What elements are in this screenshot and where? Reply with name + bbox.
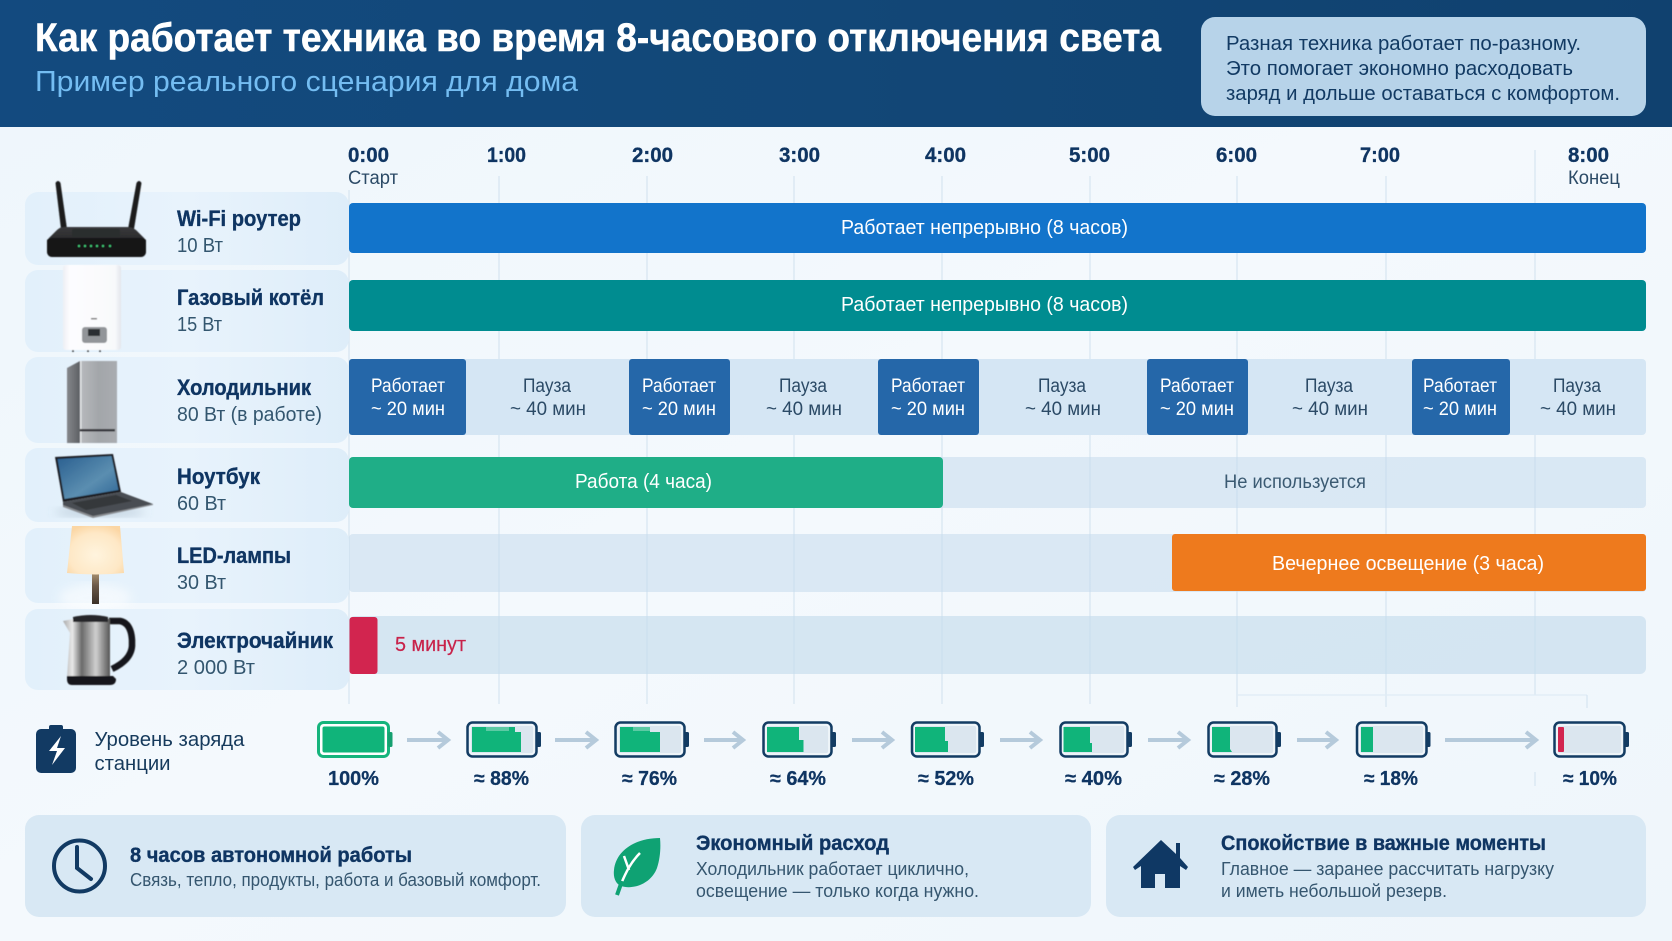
pause 1 [510,376,586,420]
battery 18%: ≈ 18% [1364,768,1418,790]
pause 2 [766,376,842,420]
battery 88% [468,722,541,790]
icon: leaf [614,838,660,895]
row: LED lamps: 30 Вт [177,572,226,594]
row: laptop [25,448,349,522]
arrow [407,732,448,748]
icon: laptop [55,454,153,518]
row: Wi-Fi router: Wi-Fi роутер [177,206,301,231]
subtitle: Пример реального сценария для дома [35,66,579,98]
battery 40%: ≈ 40% [1065,768,1122,790]
row: kettle: Электрочайник [177,628,334,653]
row: gas boiler [25,265,349,352]
battery label: Уровень заряда [94,729,245,751]
bar: kettle usage [349,616,1646,674]
bar: lamps usage: Вечернее освещение (3 часа) [1272,553,1544,575]
callout: Это помогает экономно расходовать [1226,58,1573,80]
bar: lamps usage [349,534,1646,592]
time axis labels: 8:00 [1568,144,1609,167]
battery 88%: ≈ 88% [474,768,529,790]
time axis labels [348,144,1620,189]
time axis labels: Старт [348,168,398,189]
arrow [704,732,743,748]
panel: economical use: освещение — только когда нужно. [696,881,979,901]
time axis labels: 7:00 [1360,144,1400,167]
time axis labels: 6:00 [1216,144,1257,167]
bar: router continuous: Работает непрерывно (8 часов) [841,217,1128,239]
row: laptop: 60 Вт [177,493,226,515]
pause 5: Пауза [1553,376,1601,397]
row: gas boiler: 15 Вт [177,314,222,336]
panel: 8 hours autonomy [25,815,566,917]
work block 1: Работает [371,376,445,397]
work block 4: Работает [1160,376,1234,397]
pause 1: Пауза [523,376,571,397]
work block 1: ~ 20 мин [371,399,445,420]
battery 64% [764,722,836,790]
callout: заряд и дольше оставаться с комфортом. [1226,83,1620,105]
time axis labels: 3:00 [779,144,820,167]
row: kettle [25,609,349,690]
callout [1201,17,1646,116]
pause 1: ~ 40 мин [510,399,586,420]
time axis labels: 0:00 [348,144,389,167]
panel: peace of mind: Главное — заранее рассчитать нагрузку [1221,859,1554,879]
battery 10% [1554,722,1629,790]
icon: house [1133,840,1188,888]
work block 2: Работает [642,376,716,397]
arrow [1148,732,1188,748]
icon: battery with bolt [36,725,76,773]
icon: fridge [67,361,117,443]
arrow [555,732,596,748]
battery label: станции [94,753,170,775]
pause 3: Пауза [1038,376,1086,397]
bar: laptop usage [349,457,1646,508]
work block 4 [1147,359,1248,435]
arrow [1297,732,1336,748]
work block 3: ~ 20 мин [891,399,965,420]
row: fridge [25,357,349,443]
panel: 8 hours autonomy: 8 часов автономной работы [130,844,412,867]
pause 5 [1540,376,1616,420]
battery 100% [318,722,392,790]
work block 1 [349,359,466,435]
bar: kettle usage: 5 минут [395,634,466,656]
work block 5 [1412,359,1510,435]
time axis labels: 5:00 [1069,144,1110,167]
arrow [852,732,892,748]
work block 2 [629,359,730,435]
panel: economical use: Холодильник работает циклично, [696,859,969,879]
bar: boiler continuous [349,280,1646,331]
pause 5: ~ 40 мин [1540,399,1616,420]
panel: peace of mind: Спокойствие в важные моменты [1221,832,1546,855]
pause 4 [1292,376,1368,420]
bar: fridge cycles [349,359,1646,435]
row: fridge: 80 Вт (в работе) [177,404,322,426]
time axis labels: 1:00 [487,144,526,167]
battery label [94,729,245,775]
work block 3 [878,359,979,435]
pause 4: Пауза [1305,376,1353,397]
pause 2: ~ 40 мин [766,399,842,420]
panel: peace of mind [1106,815,1646,917]
battery 76%: ≈ 76% [622,768,677,790]
callout: Разная техника работает по-разному. [1226,33,1581,55]
icon: clock [54,840,105,892]
work block 5: ~ 20 мин [1423,399,1497,420]
time axis labels: 4:00 [925,144,966,167]
pause 2: Пауза [779,376,827,397]
row: LED lamps [25,526,349,612]
battery 40% [1060,722,1132,790]
panel: economical use [581,815,1091,917]
battery 76% [616,722,689,790]
panel: peace of mind: и иметь небольшой резерв. [1221,881,1447,901]
bar: laptop usage: Не используется [1224,472,1366,493]
row: laptop: Ноутбук [177,464,261,489]
icon: router [47,181,146,257]
battery 64%: ≈ 64% [770,768,826,790]
time axis labels: 2:00 [632,144,673,167]
row: kettle: 2 000 Вт [177,657,255,679]
row: gas boiler: Газовый котёл [177,285,324,310]
arrow [1445,732,1536,748]
work block 4: ~ 20 мин [1160,399,1234,420]
bar: router continuous [349,203,1646,253]
panel: 8 hours autonomy: Связь, тепло, продукты, работа и базовый комфорт. [130,870,541,890]
bar: boiler continuous: Работает непрерывно (8 часов) [841,294,1128,316]
row: fridge: Холодильник [177,375,312,400]
pause 3 [1025,376,1101,420]
work block 5: Работает [1423,376,1497,397]
arrow [1000,732,1040,748]
icon: kettle [63,615,132,685]
battery 52%: ≈ 52% [918,768,974,790]
icon: lamp [59,526,131,612]
work block 3: Работает [891,376,965,397]
work block 2: ~ 20 мин [642,399,716,420]
row: Wi-Fi router: 10 Вт [177,235,223,257]
battery 10%: ≈ 10% [1563,768,1617,790]
row: LED lamps: LED-лампы [177,543,291,568]
time axis labels: Конец [1568,168,1620,189]
timeline grid lines [349,150,1587,786]
bar: laptop usage: Работа (4 часа) [575,471,712,493]
battery 100%: 100% [328,768,379,790]
icon: boiler [63,265,121,352]
battery 18% [1357,722,1430,790]
battery 28%: ≈ 28% [1214,768,1270,790]
pause 3: ~ 40 мин [1025,399,1101,420]
battery 52% [912,722,984,790]
battery 28% [1208,722,1281,790]
battery level section [36,722,1629,790]
row: Wi-Fi router [25,181,349,265]
title: Как работает техника во время 8-часового отключения света [35,16,1162,60]
panel: economical use: Экономный расход [696,832,889,855]
header band [0,0,1672,127]
pause 4: ~ 40 мин [1292,399,1368,420]
